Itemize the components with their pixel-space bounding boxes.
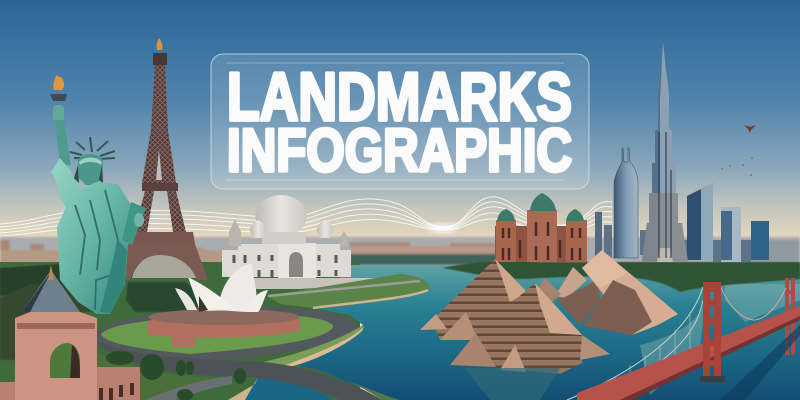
torch flame: [53, 75, 64, 90]
grass lower: [97, 352, 225, 400]
right group: rear left pyramid light: [555, 267, 587, 298]
torch flame on tip: [157, 38, 162, 50]
sand shore: [283, 325, 365, 366]
palace windows: [503, 222, 580, 260]
plinth: [244, 278, 400, 289]
landmark: red sandstone arch gate: [0, 265, 140, 400]
water reflections: [640, 284, 800, 395]
iwan block: [278, 243, 316, 278]
dome: left: [497, 209, 515, 221]
hangers: [615, 312, 690, 383]
crown spikes: [70, 137, 115, 159]
tower: pale tower: [721, 207, 741, 262]
minaret left: [229, 219, 241, 246]
tower: glass block: [687, 183, 713, 260]
deck: [577, 306, 800, 400]
main left pyramid light side: [495, 259, 527, 302]
tower: slim left tower: [595, 212, 602, 256]
Burj dark ribs: [659, 132, 671, 258]
shell: left: [175, 288, 197, 310]
deck shadow: [620, 316, 800, 400]
upper spire lattice: [142, 65, 176, 183]
far tower: [785, 278, 795, 355]
tower foot: [700, 376, 725, 382]
bridge shadow on water: [720, 325, 800, 400]
dark robe shadow: [100, 240, 127, 313]
title line one: LANDMARKS: [227, 60, 572, 135]
palace recessed wall: [495, 226, 587, 262]
cables far span: [721, 287, 786, 320]
distant tree line: [0, 261, 800, 360]
raised arm: [55, 120, 71, 165]
promenade road: [268, 281, 420, 296]
near tower: [703, 282, 721, 378]
tower: twin-spire glass tower: [614, 148, 638, 258]
torch platform: [50, 94, 67, 101]
land: left ground: [0, 262, 360, 400]
landmark: Taj Mahal: [222, 195, 400, 289]
backdrop low-rise buildings: [604, 225, 751, 262]
tablet: [122, 202, 146, 245]
small pyramid left: [420, 314, 447, 330]
water lower channel: [245, 377, 333, 400]
hair / veil: [74, 165, 103, 183]
right group: main pyramid light: [582, 250, 678, 335]
water: river and bay: [293, 265, 800, 400]
arch body: [15, 312, 97, 400]
landmark: Statue of Liberty: [50, 75, 146, 314]
green strip by highway: [315, 368, 400, 400]
arch frieze: [17, 323, 95, 329]
title line two: INFOGRAPHIC: [227, 116, 572, 184]
grass oval: [101, 314, 333, 354]
small stepped pyramid right: [580, 335, 610, 360]
centre gap: [156, 150, 162, 180]
shell: far right large: [218, 264, 256, 312]
podium annex: [172, 334, 195, 347]
glow at wave convergence: [429, 223, 457, 233]
Burj spire and tiers: [642, 42, 688, 262]
landmark: Golden Gate Bridge: [567, 278, 800, 400]
main cable: [567, 287, 703, 400]
main dome: [256, 195, 306, 237]
landmark: Burj skyscraper and downtown towers: [595, 42, 769, 262]
small dome left: [250, 220, 266, 238]
arch opening shadow: [70, 345, 80, 378]
palace right tower: [566, 220, 587, 262]
pyramid reflections: [465, 368, 560, 400]
side windows: [234, 255, 336, 277]
right group: left ridge: [538, 278, 561, 302]
podium top: [148, 309, 300, 325]
glass card: [211, 54, 589, 189]
main body: [222, 244, 351, 277]
head: [78, 154, 103, 185]
small pyramid bottom: [500, 345, 526, 372]
right group: main dark face: [583, 280, 652, 335]
small pyramid bottom left: [450, 333, 496, 367]
pyramid dark face: [22, 272, 51, 312]
landmark: Eiffel Tower: [125, 38, 208, 280]
right group: main pyramid cap: [582, 250, 627, 288]
right group: rear left pyramid dark: [557, 280, 600, 325]
lower base with arch: [125, 244, 208, 280]
small dome right: [317, 220, 333, 238]
ring road: [95, 307, 358, 362]
lawn island: [267, 274, 429, 308]
dome: centre: [530, 193, 556, 211]
second platform: [142, 183, 178, 191]
robe deep folds: [75, 190, 118, 310]
pyramid roof: [22, 270, 80, 312]
flowing white wave lines: [0, 197, 612, 236]
palace left tower: [496, 220, 516, 262]
birds: flock: [721, 157, 753, 176]
tower: glass block highlight: [701, 183, 713, 260]
main left pyramid stepped side: [432, 259, 527, 340]
dome: right: [566, 209, 584, 221]
minaret right: [340, 231, 348, 247]
Burj base: [657, 248, 673, 262]
tower: pale tower shade: [721, 211, 732, 260]
side wings: [0, 367, 140, 400]
arch opening: [50, 343, 80, 378]
bottom hairline: [226, 179, 564, 181]
podium: [148, 312, 300, 338]
raised hand: [53, 105, 64, 122]
draped robe: [51, 158, 146, 314]
roads and Opera grass island: [95, 307, 400, 400]
shell shadow: [199, 296, 208, 312]
mid legs left: [134, 191, 154, 232]
scenery seen through arch: [132, 255, 197, 278]
Burj shade: [642, 42, 663, 262]
front pyramid light wedge: [535, 283, 582, 335]
lower road: [145, 376, 232, 400]
top platform: [153, 53, 167, 65]
mid legs right: [167, 191, 186, 232]
river-side lawn strip: [267, 274, 429, 308]
small pyramid middle: [440, 312, 478, 340]
sand edge: [313, 290, 428, 308]
tower: blue glass tower: [751, 221, 769, 260]
distant city skyline: [0, 237, 800, 267]
holding hand: [134, 213, 144, 227]
landmark: Sydney Opera House: [148, 264, 300, 347]
central arch: [289, 252, 303, 277]
shell: right: [246, 290, 268, 312]
palace centre block: [527, 210, 557, 262]
roof finial: [48, 265, 54, 280]
bird: large: [744, 125, 756, 133]
sand quay at lower channel: [228, 377, 258, 400]
Burj lower tier stone: [642, 193, 688, 262]
lawn below ring road: [247, 325, 363, 365]
tree clumps: [106, 351, 246, 400]
crown band: [79, 158, 102, 165]
top hairline: [226, 62, 564, 64]
landmark: pyramids of Giza: [420, 250, 678, 400]
title panel: [211, 54, 589, 189]
curving highway to bridge: [95, 340, 382, 400]
second cable: [587, 300, 703, 400]
landmark: red-brick palace: [495, 193, 587, 262]
dome neck: [262, 232, 306, 244]
wing windows: [101, 383, 132, 400]
first platform: [125, 232, 195, 244]
shell: mid: [188, 277, 237, 311]
front pyramid stepped body: [457, 283, 582, 374]
